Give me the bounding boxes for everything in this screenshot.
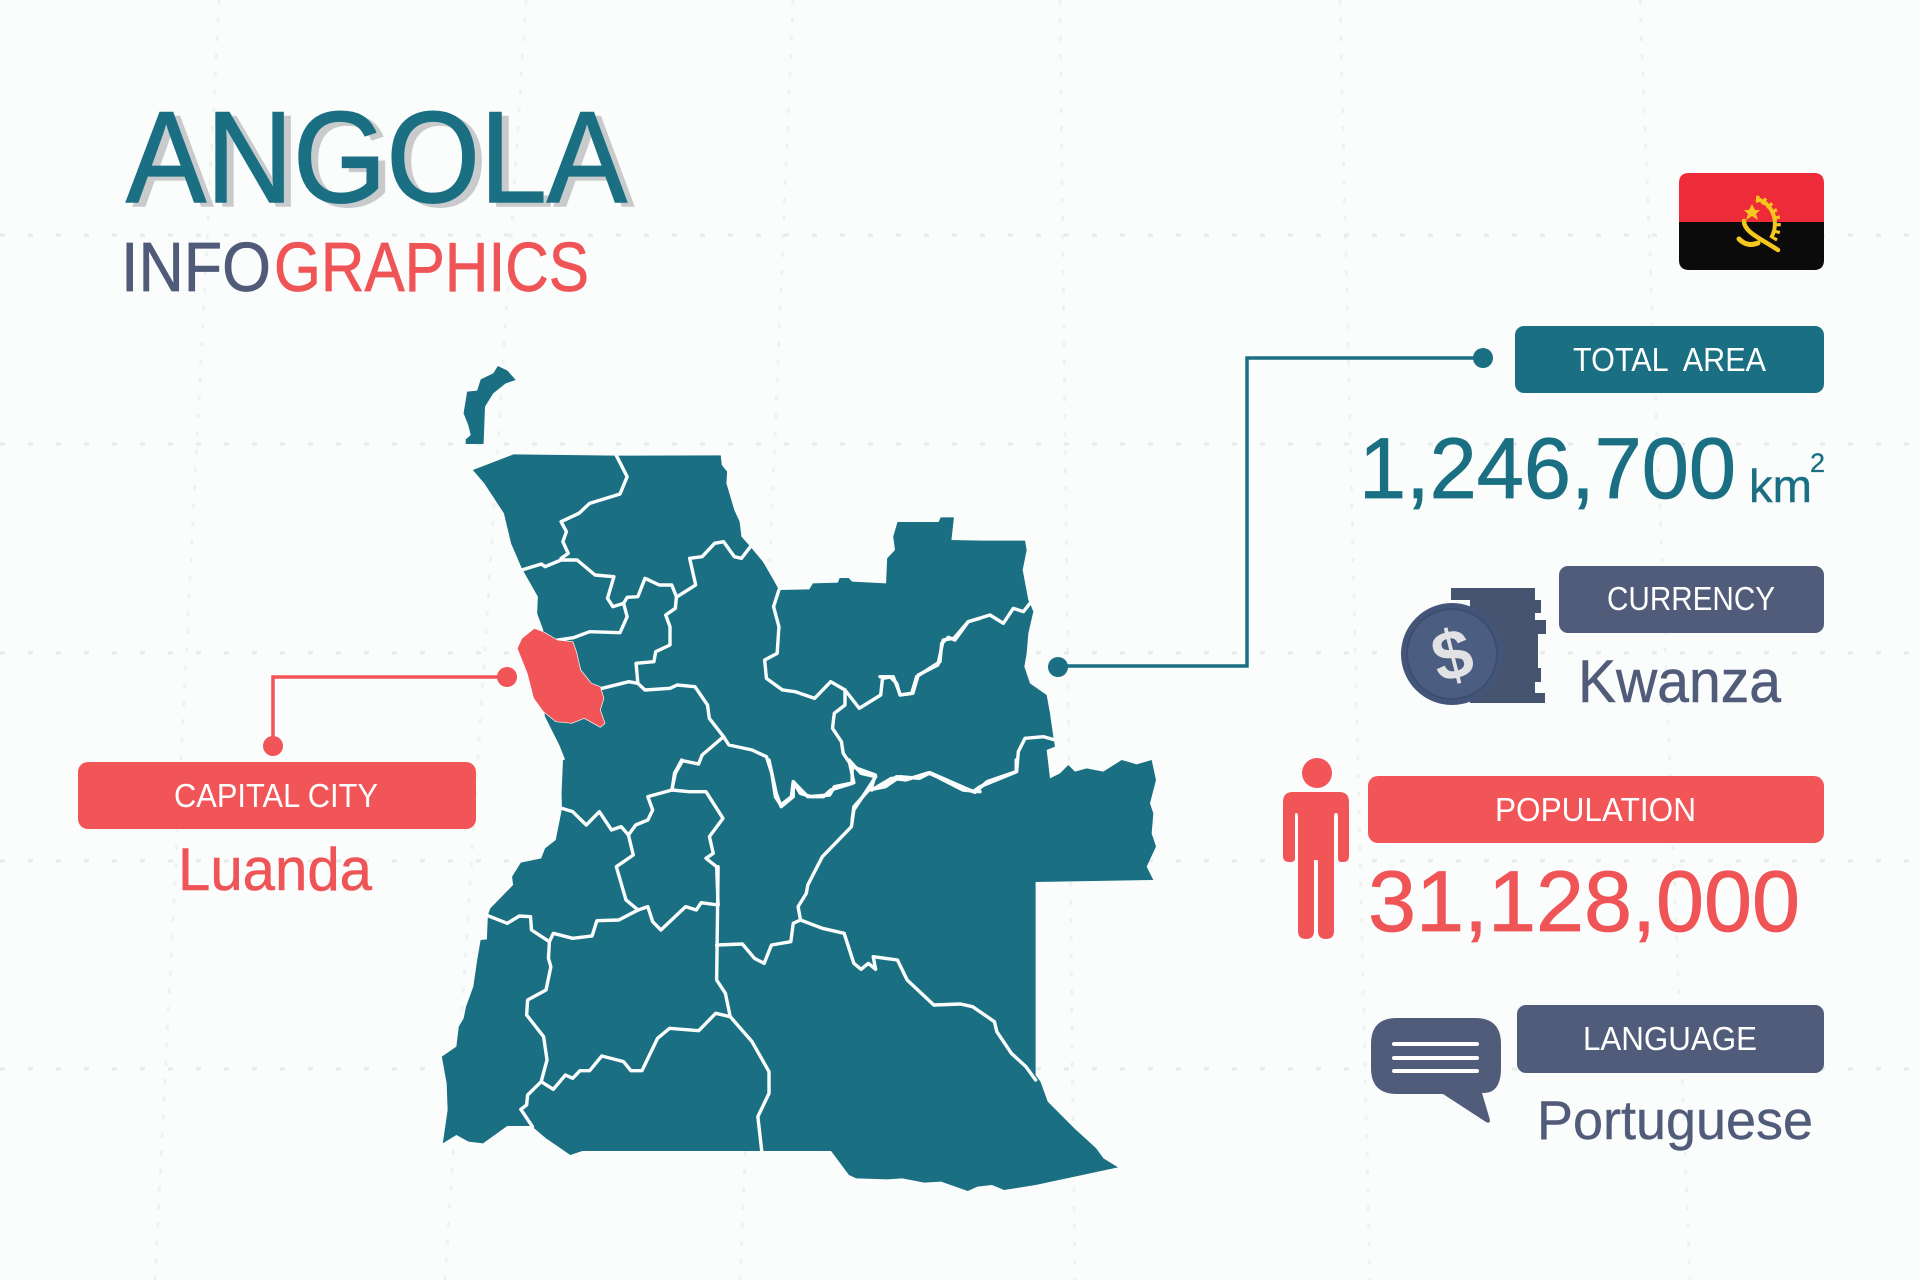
value: Portuguese: Portuguese	[1537, 1089, 1813, 1151]
pill: CAPITAL CITY: CAPITAL CITY	[174, 777, 378, 814]
pill: LANGUAGE	[1517, 1005, 1824, 1073]
pill: CAPITAL CITY	[78, 762, 476, 829]
value: population: 31,128,000	[1368, 854, 1800, 950]
map: northern landmass	[473, 454, 980, 820]
pill: POPULATION	[1368, 776, 1824, 843]
pill: POPULATION: POPULATION	[1495, 791, 1696, 828]
pill: TOTAL AREA: TOTAL AREA	[1573, 341, 1766, 378]
subtitle: INFOGRAPHICS: GRAPHICS	[274, 228, 589, 306]
pill: TOTAL AREA	[1515, 326, 1824, 393]
value: total area: km	[1749, 460, 1812, 512]
subtitle: INFOGRAPHICS	[121, 228, 589, 306]
map: eastern lobe	[880, 541, 1156, 900]
subtitle: INFOGRAPHICS: INFO	[121, 228, 271, 306]
title: ANGOLA: ANGOLA	[126, 84, 627, 230]
map: eastern province borders	[880, 603, 1055, 792]
pill: CURRENCY: CURRENCY	[1607, 580, 1775, 617]
title: ANGOLA: ANGOLA	[133, 88, 634, 234]
value: Kwanza: Kwanza	[1578, 648, 1782, 715]
map: southern landmass	[442, 760, 1118, 1191]
map: Luanda province highlight	[517, 628, 605, 727]
map: southern province borders	[488, 760, 1036, 1151]
map: Angola provinces	[442, 366, 1156, 1191]
value: total area: 1,246,700	[1359, 421, 1736, 517]
icon: speech bubble	[1371, 1018, 1501, 1123]
map: northern province borders	[522, 456, 980, 820]
pill: LANGUAGE: LANGUAGE	[1583, 1020, 1757, 1057]
pill: CURRENCY	[1559, 566, 1824, 633]
value: total area: 2	[1810, 448, 1825, 478]
value: Luanda: Luanda	[178, 836, 373, 903]
icon: person	[1283, 758, 1349, 939]
icon: coins	[1401, 588, 1546, 705]
connector: total area	[1048, 348, 1493, 677]
icon: coins: $	[1424, 612, 1481, 698]
icon: Angola flag	[1679, 173, 1824, 270]
connector: capital city	[263, 667, 517, 756]
map: Cabinda exclave	[464, 366, 516, 444]
